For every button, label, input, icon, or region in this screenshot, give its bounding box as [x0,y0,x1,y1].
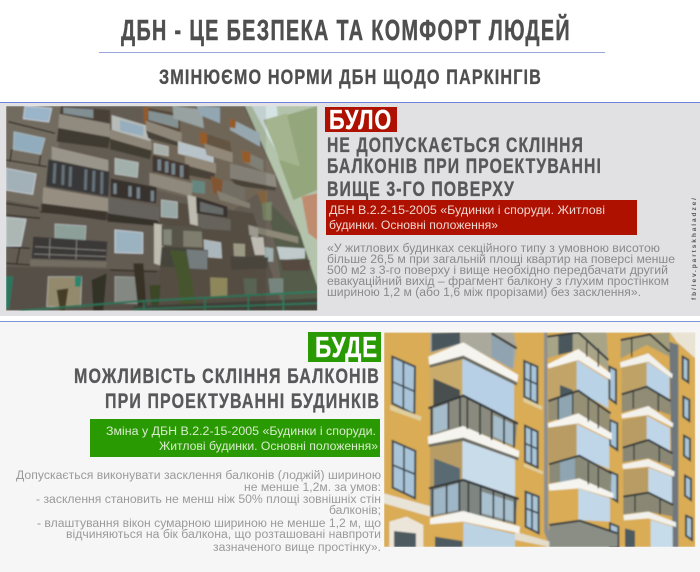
text block: new norm conditions: Допускається виконувати засклення балконів (лоджій) шириною [16,470,381,482]
text block: old norm quote: 500 м2 з 3-го поверху і вище необхідно передбачати другий [327,265,668,277]
text block: new norm conditions: зазначеного вище простінку». [213,542,381,554]
balcony row 2 [52,147,108,172]
heading: було: БАЛКОНІВ ПРИ ПРОЕКТУВАННІ [327,154,602,178]
callout: old norm reference: ДБН В.2.2-15-2005 «Будинки і споруди. Житлові [329,205,605,217]
windows [23,106,52,122]
callout: old norm reference [326,200,637,235]
heading: було: ВИЩЕ 3-ГО ПОВЕРХУ [327,177,515,201]
wall seams [6,122,160,272]
trees and fence [170,250,196,304]
heading: буде: МОЖЛИВІСТЬ СКЛІННЯ БАЛКОНІВ [74,364,380,388]
text block: old norm quote: більше 26,5 м при загальній площі квартир на поверсі менше [327,254,675,266]
callout: new norm reference [90,419,380,457]
windows [392,357,692,547]
subtitle: ЗМІНЮЄМО НОРМИ ДБН ЩОДО ПАРКІНГІВ [159,65,542,89]
text block: new norm conditions: - засклення становить не менш ніж 50% площі зовнішніх стін [36,494,381,506]
photo: old building with unglazed balconies [6,106,317,311]
heading: було [327,133,602,201]
badge: буде: БУДЕ [315,332,378,364]
text block: old norm quote: шириною 1,2 м (або 1,6 між прорізами) без засклення». [327,287,641,299]
header [99,13,605,89]
column 1 balconies [430,332,517,370]
text block: old norm quote [327,243,675,299]
panel: було [0,102,700,316]
callout: new norm reference: Житлові будинки. Основні положення» [159,441,378,453]
column 3 balconies [621,332,669,358]
callout: new norm reference: Зміна у ДБН В.2.2-15-2005 «Будинки і споруди. [106,426,376,438]
badge: було: БУЛО [329,104,392,135]
heading: буде: ПРИ ПРОЕКТУВАННІ БУДИНКІВ [105,389,380,413]
credit: fb/lev.partskhaladze/ [691,198,698,300]
text block: new norm conditions: - влаштування вікон сумарною шириною не менше 1,2 м, що [37,518,381,530]
heading: буде [74,364,380,413]
panel: буде [0,322,700,572]
photo: new building with glazed balconies [384,332,695,547]
column 2 balconies [547,332,608,370]
heading: було: НЕ ДОПУСКАЄТЬСЯ СКЛІННЯ [327,133,584,157]
balcony row 1 [60,106,110,123]
sky and tree [245,106,317,287]
text block: new norm conditions: балконів; [329,505,381,517]
text block: old norm quote: евакуаційний вихід – фрагмент балкону з глухим простінком [327,276,669,288]
text block: new norm conditions [16,470,381,554]
text block: old norm quote: «У житлових будинках секційного типу з умовною висотою [327,243,660,255]
callout: old norm reference: будинки. Основні положення» [329,220,498,232]
text block: new norm conditions: відчиняються на бік балкона, що розташовані навпроти [66,529,381,541]
text block: new norm conditions: не менше 1,2м. за умов: [244,482,381,494]
lower open balconies [32,237,107,261]
